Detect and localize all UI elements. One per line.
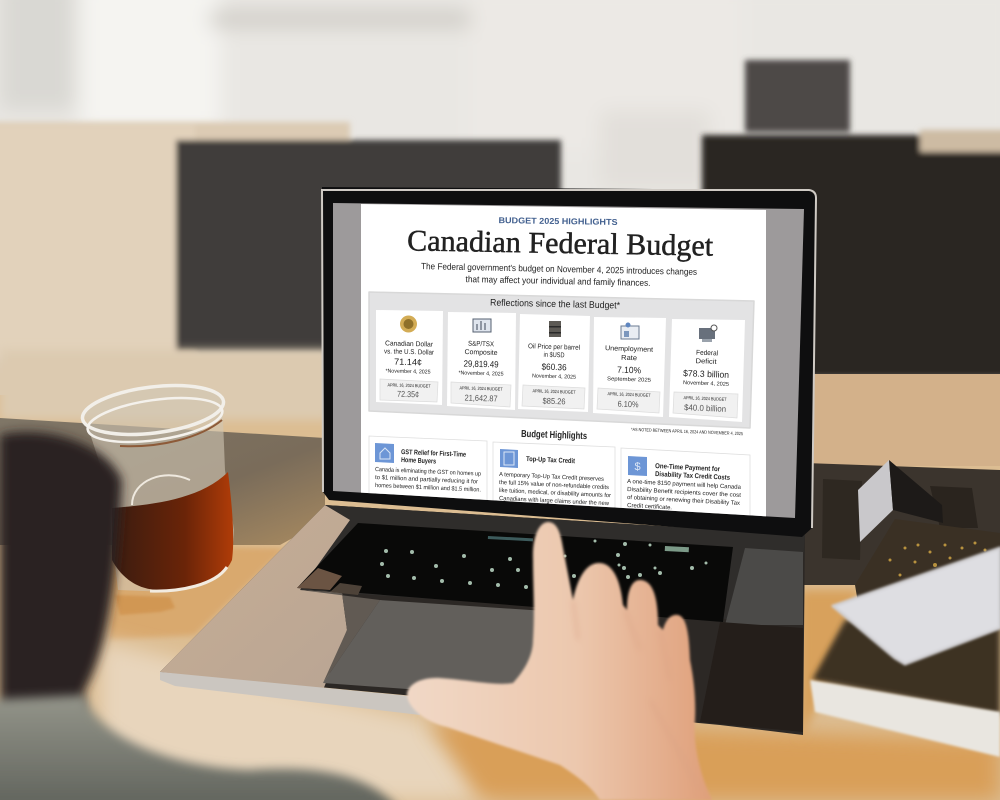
budget highlights heading: Budget Highlights — [521, 429, 588, 442]
card: unemployment rate: Unemployment — [605, 345, 653, 354]
card: one-time payment for disability tax credit costs — [620, 448, 750, 516]
card: one-time payment for disability tax credit costs: A one-time $150 payment will help Canada — [627, 479, 742, 491]
card: Canadian dollar: 71.14¢ — [394, 357, 422, 367]
keyboard — [297, 523, 733, 622]
card: oil price: APRIL 16, 2024 BUDGET — [532, 388, 576, 395]
intro text: that may affect your individual and family finances. — [465, 274, 651, 288]
card: Canadian dollar: APRIL 16, 2024 BUDGET — [387, 382, 431, 389]
card: top-up tax credit: A temporary Top-Up Tax Credit preserves — [499, 472, 604, 483]
card: GST relief: Canada is eliminating the GST on homes up — [375, 467, 482, 478]
dark desk mat right — [803, 463, 1000, 585]
dark desk mat left — [0, 418, 325, 545]
card: one-time payment for disability tax credit costs: Disability Tax Credit Costs — [655, 471, 730, 482]
icon: tax form — [500, 449, 518, 468]
icon: stock monitor — [473, 319, 491, 332]
card: one-time payment for disability tax credit costs: Credit certificate. — [627, 503, 672, 511]
card: top-up tax credit: Canadians with large claims under the new — [499, 496, 610, 507]
icon: ID badge — [621, 322, 639, 339]
main title: Canadian Federal Budget — [407, 224, 714, 263]
budget infographic page on screen — [361, 204, 766, 530]
card: oil price — [518, 314, 590, 412]
blurred cafe background — [0, 0, 1000, 430]
card: oil price: in $USD — [543, 352, 565, 359]
card: Canadian dollar: *November 4, 2025 — [385, 368, 431, 376]
card: top-up tax credit: like tuition, medical, or disability amounts for — [499, 488, 611, 499]
card: S&P/TSX composite: 21,642.87 — [464, 392, 498, 404]
white page — [361, 204, 766, 530]
card: GST relief: GST Relief for First-Time — [401, 449, 466, 459]
card: unemployment rate — [593, 317, 666, 417]
blurred person in foreground — [0, 432, 400, 800]
card: S&P/TSX composite: Composite — [464, 349, 498, 357]
card: federal deficit: $40.0 billion — [684, 402, 727, 414]
footnote: *AS NOTED BETWEEN APRIL 16, 2024 AND NOVEMBER 4, 2025 — [631, 427, 744, 436]
glass jar — [80, 379, 234, 592]
gold patterned notebook — [810, 519, 1000, 757]
card: federal deficit — [669, 319, 745, 422]
card: oil price: November 4, 2025 — [532, 373, 576, 381]
card: S&P/TSX composite: 29,819.49 — [463, 359, 499, 369]
card: federal deficit: November 4, 2025 — [683, 380, 729, 388]
card: S&P/TSX composite: S&P/TSX — [468, 341, 494, 348]
intro text — [421, 261, 698, 288]
spilled drink stain — [115, 595, 175, 615]
card: top-up tax credit: Top-Up Tax Credit — [526, 456, 576, 465]
card: federal deficit: APRIL 16, 2024 BUDGET — [683, 395, 727, 402]
icon: coin — [400, 316, 417, 332]
card: federal deficit: Deficit — [695, 358, 717, 366]
card: federal deficit: $78.3 billion — [683, 368, 729, 380]
phone on notebook — [833, 548, 1000, 664]
black box on mat — [858, 460, 943, 542]
panel heading: Reflections since the last Budget* — [490, 298, 620, 311]
card: Canadian dollar — [376, 310, 443, 405]
card: federal deficit: Federal — [696, 350, 719, 357]
card: Canadian dollar: vs. the U.S. Dollar — [384, 348, 435, 357]
laptop base — [160, 505, 805, 735]
trackpad — [323, 600, 560, 700]
finger shading — [573, 600, 700, 790]
card: S&P/TSX composite: APRIL 16, 2024 BUDGET — [459, 385, 503, 392]
card: oil price: Oil Price per barrel — [528, 343, 581, 352]
card: unemployment rate: 7.10% — [617, 365, 641, 375]
card: S&P/TSX composite: *November 4, 2025 — [458, 370, 504, 378]
wooden table — [0, 350, 1000, 800]
icon: oil barrel — [549, 321, 561, 337]
card: unemployment rate: APRIL 16, 2024 BUDGET — [607, 391, 651, 398]
hand pointing at keyboard — [407, 522, 712, 800]
icon: dollar payment: $ — [634, 461, 641, 473]
card: GST relief — [368, 436, 488, 500]
card: Canadian dollar: Canadian Dollar — [385, 340, 434, 349]
card: GST relief: Home Buyers — [401, 457, 436, 465]
card: one-time payment for disability tax credit costs: One-Time Payment for — [655, 463, 720, 473]
front edge — [160, 672, 420, 715]
card: one-time payment for disability tax credit costs: of obtaining or renewing their Disability Tax — [627, 495, 740, 507]
card: GST relief: to $1 million and partially reducing it for — [375, 475, 478, 485]
card: unemployment rate: 6.10% — [617, 399, 639, 409]
card: unemployment rate: Rate — [621, 355, 637, 362]
card: oil price: $60.36 — [541, 362, 567, 372]
icon: monitor with alert — [699, 325, 717, 342]
card: unemployment rate: September 2025 — [607, 376, 651, 384]
panel: reflections since the last budget — [369, 292, 754, 428]
eyebrow heading: BUDGET 2025 HIGHLIGHTS — [498, 215, 618, 227]
card: oil price: $85.26 — [542, 396, 566, 406]
card: GST relief: homes between $1 million and $1.5 million. — [375, 483, 481, 494]
laptop lid — [322, 187, 816, 537]
card: one-time payment for disability tax credit costs: Disability Benefit recipients cover the cost — [627, 487, 741, 499]
intro text: The Federal government's budget on November 4, 2025 introduces changes — [421, 261, 698, 277]
card: top-up tax credit — [492, 442, 616, 508]
card: S&P/TSX composite — [447, 312, 516, 410]
laptop screen — [333, 203, 804, 518]
card: top-up tax credit: the full 15% value of non-refundable credits — [499, 480, 609, 491]
card: Canadian dollar: 72.35¢ — [397, 389, 419, 399]
icon: house — [375, 443, 394, 463]
